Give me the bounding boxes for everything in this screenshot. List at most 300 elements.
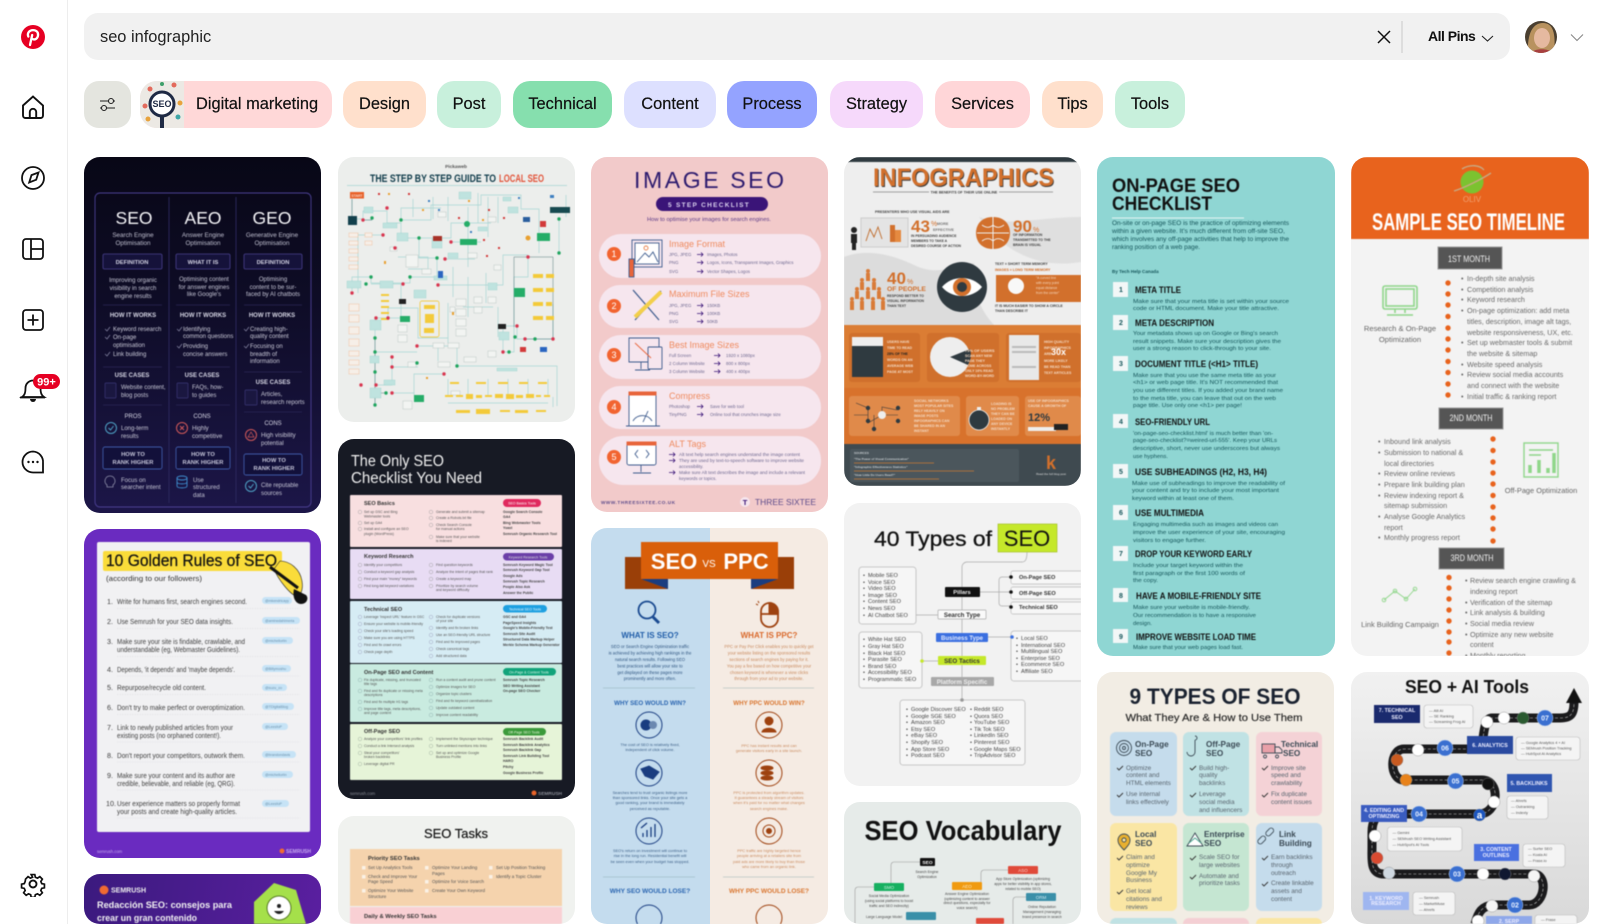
icon: home bbox=[22, 95, 44, 119]
memory note bbox=[995, 262, 1081, 313]
definition text: content to be sur- bbox=[250, 285, 296, 291]
section: SEO basics: Yoast bbox=[503, 526, 513, 530]
list: tactics: White Hat SEO bbox=[868, 637, 907, 643]
list: platforms: • bbox=[970, 714, 972, 720]
month 2 list: • bbox=[1378, 491, 1381, 500]
search type label bbox=[938, 610, 986, 619]
milestone badges: 06 bbox=[1441, 746, 1449, 752]
orange social panels: INFOGRAPHICS CAN bbox=[914, 419, 950, 423]
term: ORM: Online Reputation bbox=[1028, 905, 1056, 909]
icon: mouse bbox=[756, 601, 778, 627]
term: AEO: (optimizing content to answer bbox=[944, 897, 991, 901]
follower handle tags bbox=[262, 597, 300, 807]
red nodes bbox=[350, 206, 555, 395]
chip: tools bbox=[1115, 81, 1185, 128]
numbered rules: 2. bbox=[107, 617, 113, 626]
section: technical SEO: Identify and fix broken links bbox=[436, 626, 478, 630]
list: search types: • bbox=[863, 599, 865, 605]
list: tactics: • bbox=[863, 644, 865, 650]
follower handle tags: @michellorlin bbox=[265, 639, 287, 643]
chip: services: Services bbox=[951, 95, 1014, 113]
priority tasks box: Identify a Topic Cluster bbox=[496, 874, 542, 879]
SEO highlight: SEO bbox=[1004, 526, 1050, 551]
row details: They are used by text-to-speech software to improve website bbox=[679, 458, 805, 463]
tasks title: SEO Tasks bbox=[424, 826, 489, 841]
section: SEO basics: Bing Webmaster Tools bbox=[503, 521, 541, 525]
list: tactics: Parasite SEO bbox=[868, 657, 903, 663]
section: technical SEO: Check for duplicate versions bbox=[436, 615, 480, 619]
how it works lists: Identifying bbox=[183, 327, 210, 333]
section: technical SEO: Semrush Site Audit bbox=[503, 632, 536, 636]
type benefit text: HTML elements bbox=[1126, 780, 1171, 787]
business type label bbox=[936, 633, 988, 642]
term: ASO: related to mobile SEO) bbox=[1005, 887, 1041, 891]
research label: Research & On-Page bbox=[1364, 324, 1436, 333]
type icons bbox=[1116, 736, 1282, 850]
type headings: SEO bbox=[1135, 839, 1153, 848]
nine types subtitle: What They Are & How to Use Them bbox=[1126, 712, 1303, 724]
follower handle tags: @TDigitalBlog bbox=[265, 705, 288, 709]
month headers: 2ND MONTH bbox=[1450, 413, 1493, 424]
month 2 list: sitemap submission bbox=[1384, 501, 1447, 510]
PPC benefits text: when it's paid for no matter what changes bbox=[733, 800, 805, 805]
item body text: page-seo-checklist?=weired-url-555'. Keep your URLs bbox=[1133, 438, 1277, 444]
orange reading panels: 28% OF THE bbox=[887, 352, 908, 356]
section: keyword research: Find long-tail keyword variations bbox=[364, 584, 414, 588]
term: SMO: (using social platforms to boost bbox=[865, 899, 913, 903]
title rule bbox=[1112, 217, 1244, 219]
section: keyword research: Identify your competitors bbox=[364, 563, 402, 567]
type benefit text: Google My bbox=[1126, 870, 1158, 877]
row backgrounds bbox=[599, 234, 821, 485]
item body text: Your metadata shows up on Google or Bing's search bbox=[1133, 331, 1278, 337]
term: AEO: AEO bbox=[962, 884, 972, 889]
column titles bbox=[116, 208, 291, 228]
memory note: equal distance bbox=[1036, 286, 1057, 290]
numbered rules: credible, believable, and reliable (eg, QRG). bbox=[117, 779, 235, 788]
row details: 50KB bbox=[707, 319, 718, 324]
section: off-page SEO: Analyze your competitors' link profiles bbox=[364, 737, 423, 741]
section: on-page SEO and content: On-page SEO Checker bbox=[503, 689, 541, 693]
section: on-page SEO and content bbox=[350, 664, 562, 722]
orange reading panels: 79% OF USERS bbox=[965, 348, 995, 353]
tool notes: — Gemini bbox=[1392, 831, 1410, 835]
pros and cons: CONS bbox=[264, 421, 282, 427]
numbered rules: your posts and create high-quality articles. bbox=[117, 807, 237, 816]
list: platforms: • bbox=[906, 733, 908, 739]
presenter stat: MEMBERS TO TAKE A bbox=[911, 239, 948, 243]
number boxes: 8 bbox=[1119, 593, 1123, 600]
icon: explore compass bbox=[21, 166, 45, 190]
lower term tags bbox=[866, 912, 1004, 924]
semrush footer: SEMRUSH bbox=[538, 791, 563, 797]
step labels: OUTLINES bbox=[1483, 853, 1510, 859]
pillars label: Pillars bbox=[953, 590, 971, 596]
orange reading panels: WORDS ON AN bbox=[887, 358, 913, 362]
chip: digital marketing bbox=[140, 81, 332, 128]
PPC benefits text: PPC traffic are highly targeted hence bbox=[737, 848, 801, 853]
what is text: prominently and more often. bbox=[624, 676, 676, 681]
all pins dropdown: All Pins bbox=[1428, 28, 1475, 44]
types title: 40 Types of bbox=[874, 528, 992, 551]
nine types title: 9 TYPES OF SEO bbox=[1130, 684, 1300, 709]
list: platforms: • bbox=[906, 707, 908, 713]
list: search types: • bbox=[863, 613, 865, 619]
step labels: SEO bbox=[1391, 715, 1403, 721]
row details: TinyPNG bbox=[669, 412, 687, 417]
term: ASO bbox=[994, 866, 1052, 891]
why win headings bbox=[614, 700, 805, 707]
item body text: 'on-page-seo-checklist.html' is much better than 'on- bbox=[1133, 431, 1273, 437]
pros and cons: potential bbox=[261, 441, 284, 447]
list: search types: Voice SEO bbox=[868, 580, 896, 586]
how it works lists: Focusing on bbox=[250, 344, 283, 350]
pillar items bbox=[1009, 571, 1083, 614]
business type label: Business Type bbox=[941, 636, 984, 642]
tool notes: — SE Ranking bbox=[1429, 714, 1454, 718]
month 2 list: • bbox=[1378, 469, 1381, 478]
month 1 list: • bbox=[1461, 392, 1464, 401]
list: platforms: • bbox=[906, 747, 908, 753]
orange social panels: RELY HEAVILY ON bbox=[914, 409, 945, 413]
number badges: 1 bbox=[611, 249, 617, 259]
subtitles: Answer Engine bbox=[182, 232, 225, 239]
item headings: DOCUMENT TITLE (<H1> TITLE) bbox=[1135, 359, 1258, 370]
checklist title: Checklist You Need bbox=[351, 470, 482, 487]
chip: tips: Tips bbox=[1057, 95, 1088, 113]
definition text bbox=[109, 277, 300, 300]
SEO benefits text: SEO's return on investment will continue to bbox=[613, 848, 687, 853]
step labels: 1. KEYWORD bbox=[1369, 896, 1403, 902]
term: SMO: traffic and SEO indirectly) bbox=[869, 904, 909, 908]
section: off-page SEO: Off-Page SEO bbox=[364, 729, 401, 735]
list: platforms: • bbox=[970, 753, 972, 759]
follower handle tags: @LeesfoP bbox=[265, 725, 282, 729]
month 1 list: and connect with the website bbox=[1467, 381, 1559, 390]
how it works lists: information bbox=[250, 359, 280, 365]
how to rank higher buttons: HOW TO bbox=[191, 452, 215, 458]
type headings: Link bbox=[1279, 830, 1296, 839]
numbered rules: 9. bbox=[107, 771, 113, 780]
off-page label: Off-Page Optimization bbox=[1505, 486, 1577, 495]
pros and cons: Highly bbox=[192, 426, 209, 432]
orange reading panels: TEXT ARTICLES bbox=[1044, 371, 1072, 375]
threesixtee footer bbox=[601, 497, 816, 507]
section: SEO basics: Webmaster tools bbox=[364, 514, 390, 518]
numbered rules: 3. bbox=[107, 637, 113, 646]
definition text: Improving organic bbox=[109, 278, 157, 284]
list: tactics: • bbox=[863, 664, 865, 670]
list: platforms: Tik Tok SEO bbox=[974, 727, 1005, 733]
section: SEO basics: Create a Robots.txt file bbox=[436, 516, 472, 520]
list: search types: • bbox=[863, 606, 865, 612]
why lose headings: WHY PPC WOULD LOSE? bbox=[729, 888, 809, 895]
subtitles: Generative Engine bbox=[246, 232, 299, 239]
list: tactics: Gray Hat SEO bbox=[868, 644, 904, 650]
orange social panels: LOADING IS bbox=[991, 402, 1012, 406]
threesixtee footer: THREE SIXTEE bbox=[755, 498, 816, 507]
tool notes: — Indexly bbox=[1511, 811, 1528, 815]
type benefit text: quality bbox=[1199, 772, 1218, 779]
row details: Full Screen bbox=[669, 353, 692, 358]
definition buttons bbox=[103, 254, 302, 269]
checkmarks bbox=[1117, 766, 1268, 894]
subtitles: Optimisation bbox=[186, 240, 221, 247]
closing tips: sources bbox=[261, 491, 282, 497]
section: technical SEO: Find and fix improved pages bbox=[436, 640, 480, 644]
numbered rules: 10. bbox=[106, 799, 116, 808]
section: SEO basics: Check Search Console bbox=[436, 523, 472, 527]
sources footer: "Infographic Effectiveness Statistics" bbox=[854, 465, 908, 469]
numbered rules: Make sure your site is findable, crawlable, and bbox=[117, 637, 245, 646]
title subline: THE BENEFITS OF THEIR USE ONLINE bbox=[931, 190, 998, 194]
brain stat: BRAIN IS VISUAL bbox=[1013, 243, 1041, 247]
teal process boxes bbox=[347, 192, 518, 398]
list: search types: • bbox=[863, 593, 865, 599]
list: platforms: eBay SEO bbox=[911, 733, 938, 739]
rules title: 10 Golden Rules of SEO bbox=[106, 551, 277, 570]
priority tasks box: Set Up Analytics Tools bbox=[368, 865, 413, 870]
numbered rules: 1. bbox=[107, 597, 113, 606]
dropdown divider and chevron bbox=[1401, 21, 1494, 53]
number boxes: 9 bbox=[1119, 634, 1123, 641]
semrush footer: semrush.com bbox=[350, 791, 376, 796]
chip: tips bbox=[1042, 81, 1103, 128]
people stat: VISUAL INFORMATION bbox=[887, 299, 925, 303]
search query text: seo infographic bbox=[100, 28, 211, 46]
month 2 list: • bbox=[1378, 448, 1381, 457]
list: tactics: • bbox=[863, 657, 865, 663]
month 1 list: Website speed analysis bbox=[1467, 360, 1543, 369]
checklist pill bbox=[656, 197, 768, 211]
section: on-page SEO and content: descriptions bbox=[364, 693, 383, 697]
type benefit text: social media bbox=[1199, 799, 1235, 806]
term: ORM: Management (managing bbox=[1023, 910, 1061, 914]
tool logos: a bbox=[1477, 810, 1483, 822]
type benefit text: large websites bbox=[1199, 862, 1240, 869]
section: on-page SEO and content: Find and fix multiple H1 tags bbox=[364, 700, 408, 704]
step labels: OPTIMIZING bbox=[1369, 814, 1399, 820]
icon: notifications bell with badge bbox=[19, 374, 60, 402]
numbered rules: 4. bbox=[107, 665, 113, 674]
section: on-page SEO and content: Fix duplicate, missing, and truncated bbox=[364, 678, 421, 682]
type benefit text: content bbox=[1271, 896, 1292, 903]
list: tactics: Accessibility SEO bbox=[868, 670, 912, 676]
row icons bbox=[626, 240, 662, 473]
section: off-page SEO: Semrush Link Building Tool bbox=[503, 754, 549, 758]
research label: Optimization bbox=[1379, 335, 1421, 344]
list: business types: • bbox=[1016, 649, 1018, 655]
SEO icons bbox=[636, 712, 662, 924]
section: SEO basics: Make sure that your website bbox=[436, 535, 480, 539]
numbered rules: 5. bbox=[107, 683, 113, 692]
platform specific label: Platform Specific bbox=[937, 679, 988, 686]
type benefit text: content and bbox=[1126, 772, 1160, 779]
number boxes: 7 bbox=[1119, 551, 1123, 558]
PPC icons bbox=[756, 712, 782, 924]
icon: notifications bell with badge: 99+ bbox=[37, 376, 56, 388]
memory note: "A curved line bbox=[1036, 276, 1056, 280]
number boxes bbox=[1113, 282, 1128, 643]
type benefit text: citations and bbox=[1126, 896, 1162, 903]
chip: strategy: Strategy bbox=[846, 95, 907, 113]
number badges: 2 bbox=[611, 301, 617, 311]
type benefit text: Business bbox=[1126, 877, 1152, 884]
type headings bbox=[1135, 740, 1318, 848]
eye icon bbox=[937, 262, 987, 312]
closing tips: Cite reputable bbox=[261, 483, 299, 489]
month 2 list: • bbox=[1378, 533, 1381, 542]
priority tasks box: Priority SEO Tasks bbox=[368, 856, 420, 862]
semrush footer: SEMRUSH bbox=[286, 849, 311, 855]
list: platforms bbox=[900, 698, 1025, 765]
item body text: the copy. bbox=[1133, 578, 1158, 584]
milestone badges: 04 bbox=[1415, 812, 1423, 818]
presenter stat: % bbox=[931, 221, 937, 228]
sources footer: SOURCES bbox=[854, 451, 869, 455]
numbered rules: Make sure your content and its author are bbox=[117, 771, 235, 780]
month 3 list: • bbox=[1465, 630, 1468, 639]
sources footer: "The Power of Visual Communication" bbox=[854, 457, 909, 461]
banner: VS bbox=[702, 559, 716, 570]
section: off-page SEO: broken backlinks bbox=[364, 755, 390, 759]
panel: SEO vocabulary bbox=[844, 802, 1081, 924]
month 3 list: Review search engine crawling & bbox=[1470, 576, 1576, 585]
list: platforms: YouTube SEO bbox=[974, 720, 1010, 726]
image SEO title: IMAGE SEO bbox=[634, 167, 784, 193]
semrush footer bbox=[350, 790, 563, 797]
list: platforms: • bbox=[906, 720, 908, 726]
closing tips bbox=[105, 476, 299, 499]
priority tasks box: Pages bbox=[432, 871, 446, 876]
row titles: ALT Tags bbox=[669, 439, 707, 449]
panel: SEO tasks bbox=[338, 816, 575, 924]
item headings: DROP YOUR KEYWORD EARLY bbox=[1135, 549, 1253, 560]
section: off-page SEO: Leverage digital PR bbox=[364, 762, 395, 766]
month 1 list: Review social media accounts bbox=[1467, 370, 1564, 379]
milestone badges: 05 bbox=[1452, 778, 1459, 786]
priority tasks box: Create Your Own Keyword bbox=[432, 888, 486, 893]
chip: design: Design bbox=[359, 95, 410, 113]
section: technical SEO: Merkle Schema Markup Generator bbox=[503, 643, 560, 647]
term: ASO: apps for better visibility in app stores, bbox=[994, 882, 1052, 886]
priority tasks box: Optimize Your Website bbox=[368, 888, 414, 893]
definition text: for answer engines bbox=[179, 285, 229, 291]
row titles: Compress bbox=[669, 391, 711, 401]
sidebar navigation bbox=[0, 0, 68, 924]
chip: technical: Technical bbox=[528, 95, 597, 113]
tool notes: — HubSpot's AI Tools bbox=[1392, 843, 1429, 847]
list: business types: Multilingual SEO bbox=[1021, 649, 1063, 655]
section: technical SEO: Find and fix crawl errors bbox=[364, 643, 402, 647]
follower handle tags: @Billymoshu bbox=[265, 667, 286, 671]
item body text: <h1> or web page title. It's NOT recommended that bbox=[1133, 380, 1278, 386]
tool notes: — Frase bbox=[1541, 918, 1556, 922]
tool notes: — Semrush bbox=[1419, 896, 1439, 900]
section: on-page SEO and content: title tags bbox=[364, 682, 377, 686]
PPC benefits text: search engines make. bbox=[750, 806, 788, 811]
how it works lists: HOW IT WORKS bbox=[110, 313, 156, 319]
row titles: Best Image Sizes bbox=[669, 340, 740, 350]
list: platforms: • bbox=[970, 727, 972, 733]
closing tips: Use bbox=[193, 478, 204, 484]
orange social panels bbox=[844, 388, 1081, 444]
chip: process bbox=[727, 81, 817, 128]
list: platforms: LinkedIn SEO bbox=[974, 733, 1009, 739]
list: platforms: TripAdvisor SEO bbox=[974, 753, 1016, 759]
how to rank higher buttons bbox=[103, 447, 302, 475]
panel: SEO plus AI tools roadmap bbox=[1351, 672, 1589, 924]
item body text: Our recommendation is to have a responsive bbox=[1133, 613, 1257, 619]
follower handle tags: @LeesfoP bbox=[265, 802, 282, 806]
month 1 list: • bbox=[1461, 295, 1464, 304]
tool notes: — Google Analytics 4 + AI bbox=[1521, 741, 1565, 745]
green nodes bbox=[364, 216, 561, 407]
start flag: START bbox=[351, 194, 363, 198]
chip: digital marketing: SEO bbox=[152, 99, 172, 109]
icon: globe logo bbox=[1454, 166, 1491, 194]
row details: Vector Shapes, Logos bbox=[707, 269, 751, 274]
numbered rules: Link to newly published articles from your bbox=[117, 723, 234, 732]
orange reading panels: AVERAGE WEB bbox=[887, 364, 914, 368]
closing tips: data bbox=[193, 493, 205, 499]
why lose headings: WHY SEO WOULD LOSE? bbox=[610, 888, 690, 895]
list: platforms: • bbox=[970, 740, 972, 746]
checklist subtitle: How to optimise your images for search engines. bbox=[647, 217, 771, 223]
list: platforms: Shopify SEO bbox=[911, 740, 944, 746]
intro paragraph: which involves any off-page activities that help to improve the bbox=[1111, 236, 1290, 243]
presenter stat bbox=[851, 210, 962, 250]
sources footer bbox=[844, 444, 1081, 486]
item body text: code or HTML document. Make your title attractive. bbox=[1133, 306, 1279, 312]
item body text: Include your target keyword within the bbox=[1133, 563, 1244, 569]
icon: clear search bbox=[1378, 30, 1390, 44]
section: off-page SEO: Turn unlinked mentions into links bbox=[436, 744, 487, 748]
list: search types: News SEO bbox=[868, 606, 896, 612]
what is text: your website listing on the sponsored results bbox=[728, 650, 810, 656]
type benefit text: assets and bbox=[1271, 888, 1302, 895]
people stat: OF PEOPLE bbox=[887, 286, 926, 293]
orange reading panels: SCAN ANY NEW bbox=[965, 354, 993, 358]
orange social panels: BE SHARED IN AN bbox=[914, 424, 945, 428]
row details: 2 Column Website bbox=[669, 361, 705, 366]
tool notes: — HubSpot AI Analytics bbox=[1521, 752, 1561, 756]
connector tree bbox=[916, 552, 1027, 700]
section: on-page SEO and content: Improve content readability bbox=[436, 713, 478, 717]
peach outline boxes bbox=[349, 233, 372, 374]
section: SEO basics: is indexed bbox=[436, 539, 452, 543]
panel: 40 types of SEO bbox=[844, 503, 1081, 786]
section: keyword research: Keyword Research Tools bbox=[509, 556, 548, 560]
filter chip row bbox=[84, 81, 1185, 128]
icon: monitor bbox=[1383, 286, 1417, 315]
item body text: Make sure that your meta title is set within your source bbox=[1133, 299, 1290, 305]
chip: tools: Tools bbox=[1131, 95, 1169, 113]
section: keyword research bbox=[350, 549, 562, 599]
list: business types: • bbox=[1016, 669, 1018, 675]
item body text bbox=[1132, 299, 1290, 651]
SEO benefits text: The cost of SEO is relatively fixed, bbox=[620, 742, 680, 747]
month 1 list: • bbox=[1461, 338, 1464, 347]
milestone badges: 02 bbox=[1511, 902, 1519, 910]
month 3 list: Optimize any new website bbox=[1470, 630, 1554, 639]
connector lines bbox=[347, 186, 567, 407]
tool notes: — Frase.io bbox=[1528, 859, 1547, 863]
list: search types: Image SEO bbox=[868, 593, 898, 599]
section: keyword research: Analyze the intent of pages that rank bbox=[436, 570, 493, 574]
orange reading panels: BE READ THAN bbox=[1044, 365, 1071, 369]
daily tasks box: Daily & Weekly SEO Tasks bbox=[364, 914, 437, 920]
